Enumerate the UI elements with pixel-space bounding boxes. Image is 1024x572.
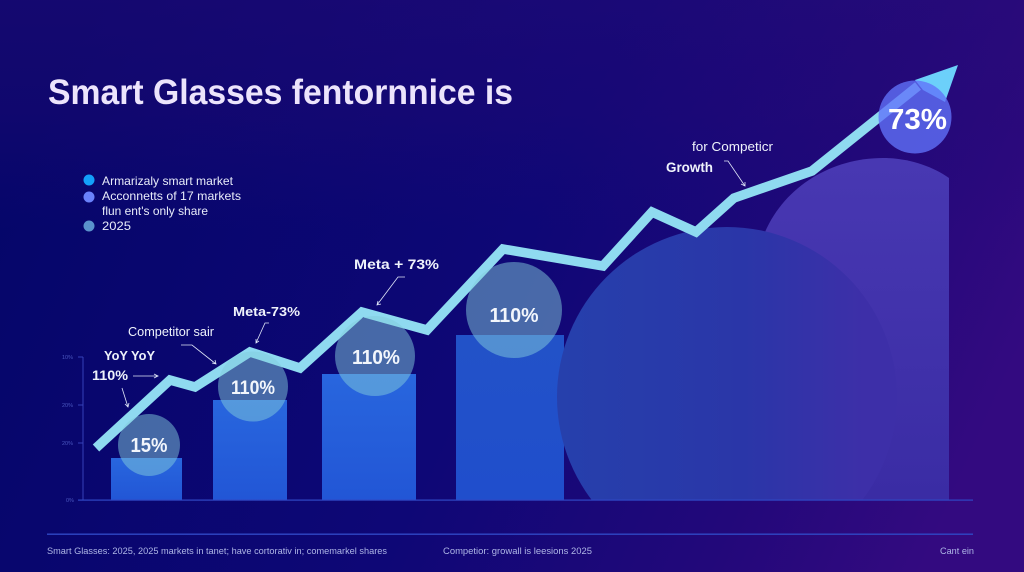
y axis: 20%	[62, 441, 73, 447]
legend item: 2025	[84, 219, 131, 233]
arrow: meta-73	[256, 323, 269, 343]
y axis: 20%	[62, 403, 73, 409]
arrow: meta+73	[377, 277, 405, 305]
bubble 110%: 110%	[352, 347, 400, 369]
bar 4	[456, 335, 564, 500]
arrow: 110% down	[122, 388, 129, 407]
bubble 110%	[218, 352, 288, 422]
bar 1	[111, 458, 182, 500]
y axis	[62, 355, 83, 504]
label: Growth: Growth	[666, 160, 713, 175]
arrow: competitor	[181, 345, 216, 364]
bubble 73%: 73%	[888, 104, 947, 136]
bubble 110%	[466, 262, 562, 358]
bubble 110%	[335, 316, 415, 396]
y axis: 0%	[66, 498, 74, 504]
footer note left: Smart Glasses: 2025, 2025 markets in tanet; have cortorativ in; comemarkel shares	[47, 546, 387, 557]
background shape: rear hill	[765, 158, 949, 500]
label: Competitor sair: Competitor sair	[128, 325, 214, 339]
growth line	[96, 86, 918, 448]
footer note right: Cant ein	[940, 546, 974, 557]
label: YoY YoY: YoY YoY	[104, 348, 155, 363]
bubble 15%: 15%	[130, 435, 168, 457]
legend item: 17 markets: Acconnetts of 17 markets	[102, 189, 241, 203]
legend item: 17 markets	[84, 189, 241, 218]
y axis: 10%	[62, 355, 73, 361]
baseline	[78, 500, 973, 501]
title: Smart Glasses fentornnice is	[48, 73, 513, 112]
background shape: front hill	[557, 227, 850, 500]
bubble 73%	[878, 80, 952, 154]
arrow: growth	[724, 161, 745, 186]
arrow: 110% to line	[133, 374, 158, 378]
label: Meta-73%: Meta-73%	[233, 304, 300, 319]
bar 3	[322, 374, 416, 500]
bubble 110%: 110%	[490, 305, 539, 327]
bubble 110%: 110%	[231, 378, 275, 399]
legend	[84, 174, 241, 233]
label: 110%: 110%	[92, 367, 129, 383]
legend item: 2025: 2025	[102, 219, 131, 233]
legend item: 17 markets: flun ent's only share	[102, 204, 208, 218]
bar 2	[213, 400, 287, 500]
footer rule	[47, 534, 973, 535]
footer note centre: Competior: growall is leesions 2025	[443, 546, 592, 557]
annotation arrows	[122, 161, 745, 407]
label: Meta + 73%: Meta + 73%	[354, 256, 440, 272]
legend item: smart market: Armarizaly smart market	[102, 174, 234, 188]
label: for Competicr: for Competicr	[692, 140, 773, 154]
bubble 15%	[118, 414, 180, 476]
arrowhead	[915, 65, 958, 102]
